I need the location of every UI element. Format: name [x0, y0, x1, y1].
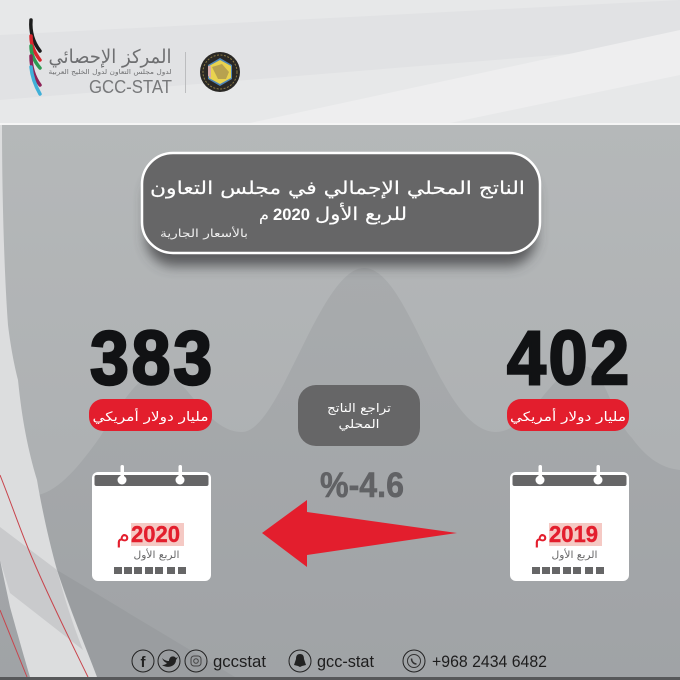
- icon: facebook: [132, 650, 154, 672]
- percent change: %-4.6: [320, 466, 404, 505]
- icon: instagram: [185, 650, 207, 672]
- icon: GCC emblem: [200, 52, 240, 92]
- icon: logo ribbons: [31, 20, 40, 94]
- dots: [114, 567, 186, 574]
- title line 2: للربع الأول: [315, 203, 407, 225]
- pill: right unit: [507, 399, 629, 431]
- logo Arabic name: المركز الإحصائي: [48, 46, 172, 68]
- header band: [0, 0, 680, 125]
- panel: title box shadow: [146, 170, 536, 266]
- arrow: [262, 500, 457, 567]
- icon: whatsapp: [403, 650, 425, 672]
- quarter label: الربع الأول: [134, 548, 180, 561]
- rings: [536, 465, 602, 484]
- icon: facebook: f: [140, 654, 146, 671]
- title year suffix: م: [259, 205, 269, 224]
- rings: [118, 465, 184, 484]
- year 2020: 2020: [131, 521, 180, 547]
- calendar: 2019: [510, 465, 629, 581]
- pill: left unit: مليار دولار أمريكي: [92, 408, 208, 425]
- dots: [532, 567, 604, 574]
- GCC-STAT logo: [31, 20, 186, 97]
- title line 1: الناتج المحلي الإجمالي في مجلس التعاون: [150, 178, 525, 199]
- logo English name: GCC-STAT: [89, 77, 172, 97]
- footer contacts: [132, 650, 547, 672]
- icon: twitter: [158, 650, 180, 672]
- quarter label: الربع الأول: [552, 548, 598, 561]
- value: 402: 402: [507, 316, 632, 401]
- handle: gcc-stat: gcc-stat: [317, 652, 374, 671]
- subtitle: current prices: بالأسعار الجارية: [160, 226, 248, 240]
- panel: title: [142, 153, 540, 253]
- callout: GDP decline: المحلي: [338, 417, 380, 431]
- calendar: 2020: [92, 465, 211, 581]
- title year: 2020: [273, 205, 310, 224]
- pill: left unit: [89, 399, 212, 431]
- year suffix: م: [116, 523, 130, 548]
- handle: gccstat: gccstat: [213, 652, 266, 671]
- year 2019: 2019: [549, 521, 598, 547]
- icon: snapchat: [289, 650, 311, 672]
- callout: GDP decline: تراجع الناتج: [327, 401, 391, 416]
- pill: right unit: مليار دولار أمريكي: [510, 408, 626, 425]
- value: 383: 383: [90, 316, 215, 401]
- logo Arabic subtitle: لدول مجلس التعاون لدول الخليج العربية: [48, 68, 172, 76]
- callout: GDP decline: [298, 385, 420, 446]
- year suffix: م: [534, 523, 548, 548]
- phone number: +968 2434 6482: [432, 652, 547, 671]
